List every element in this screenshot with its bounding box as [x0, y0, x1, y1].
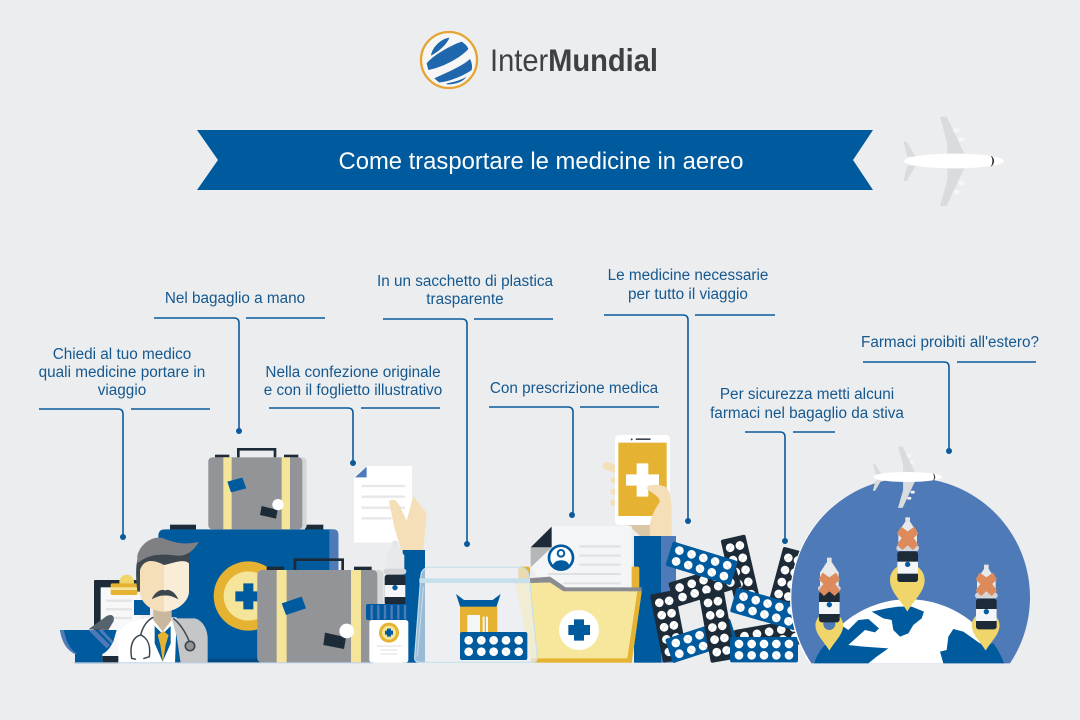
label: Chiedi al tuo medico	[39, 346, 210, 540]
paper with hand	[354, 466, 427, 663]
label: Per sicurezza	[710, 386, 904, 544]
label: Farmaci proibiti	[861, 334, 1039, 454]
pin and bottle right	[972, 565, 1000, 651]
clipboard	[94, 575, 150, 663]
upper grey suitcase	[208, 449, 307, 529]
pill jar	[366, 604, 408, 663]
label: Chiedi al tuo medico: quali medicine portare in	[39, 364, 205, 381]
big blue medical case	[158, 525, 338, 663]
pin and bottle left	[815, 558, 843, 651]
label: Nella confezione originale: Nella confezione originale	[265, 364, 441, 381]
label: Le medicine necessarie: per tutto il viaggio	[628, 286, 748, 303]
label: Chiedi al tuo medico: viaggio	[98, 382, 146, 399]
banner ribbon	[197, 130, 873, 190]
label: Le medicine necessarie: Le medicine necessarie	[608, 267, 768, 284]
label: sacchetto di plastica	[377, 273, 553, 547]
title: Come trasportare le medicine in aereo	[338, 148, 744, 175]
small airplane	[873, 447, 942, 508]
blister packs	[650, 534, 808, 663]
label: Chiedi al tuo medico: Chiedi al tuo medico	[53, 346, 191, 363]
dropper bottle	[384, 541, 406, 605]
folder with prescription	[515, 526, 642, 663]
ground line	[73, 662, 373, 663]
globe	[790, 478, 1030, 663]
label: Nel bagaglio a mano	[154, 290, 325, 434]
label: Nel bagaglio a mano: Nel bagaglio a mano	[165, 290, 305, 307]
doctor	[118, 538, 208, 663]
label: Le medicine necessarie	[604, 267, 775, 524]
icon: globe logo	[421, 32, 477, 88]
label: sacchetto di plastica: In un sacchetto di plastica	[377, 273, 553, 290]
logo: InterMundial	[421, 32, 658, 88]
banner	[197, 130, 873, 190]
label: Con prescrizione medica: Con prescrizione medica	[490, 380, 659, 397]
label: Per sicurezza: farmaci nel bagaglio da stiva	[710, 405, 904, 422]
label: Con prescrizione medica	[489, 380, 659, 518]
mortar and pestle	[60, 615, 117, 663]
label: sacchetto di plastica: trasparente	[426, 291, 504, 308]
doctor scene	[60, 538, 208, 663]
illustration: doctor and luggage	[60, 449, 427, 663]
transparent plastic bag	[415, 567, 537, 662]
lower grey suitcase	[257, 560, 383, 663]
label: Per sicurezza: Per sicurezza metti alcuni	[720, 386, 894, 403]
pin and bottle centre	[890, 517, 925, 612]
logo wordmark: InterMundial	[490, 42, 658, 78]
label: Nella confezione originale: e con il foglietto illustrativo	[264, 382, 442, 399]
label: Farmaci proibiti: Farmaci proibiti all'estero?	[861, 334, 1039, 351]
illustration: bag, folder, phone, blisters	[415, 435, 808, 663]
sleeve and hand with phone	[607, 435, 676, 663]
illustration: globe with forbidden medicines	[790, 447, 1030, 663]
label: Nella confezione originale	[264, 364, 442, 466]
icon: airplane top	[903, 117, 1004, 206]
